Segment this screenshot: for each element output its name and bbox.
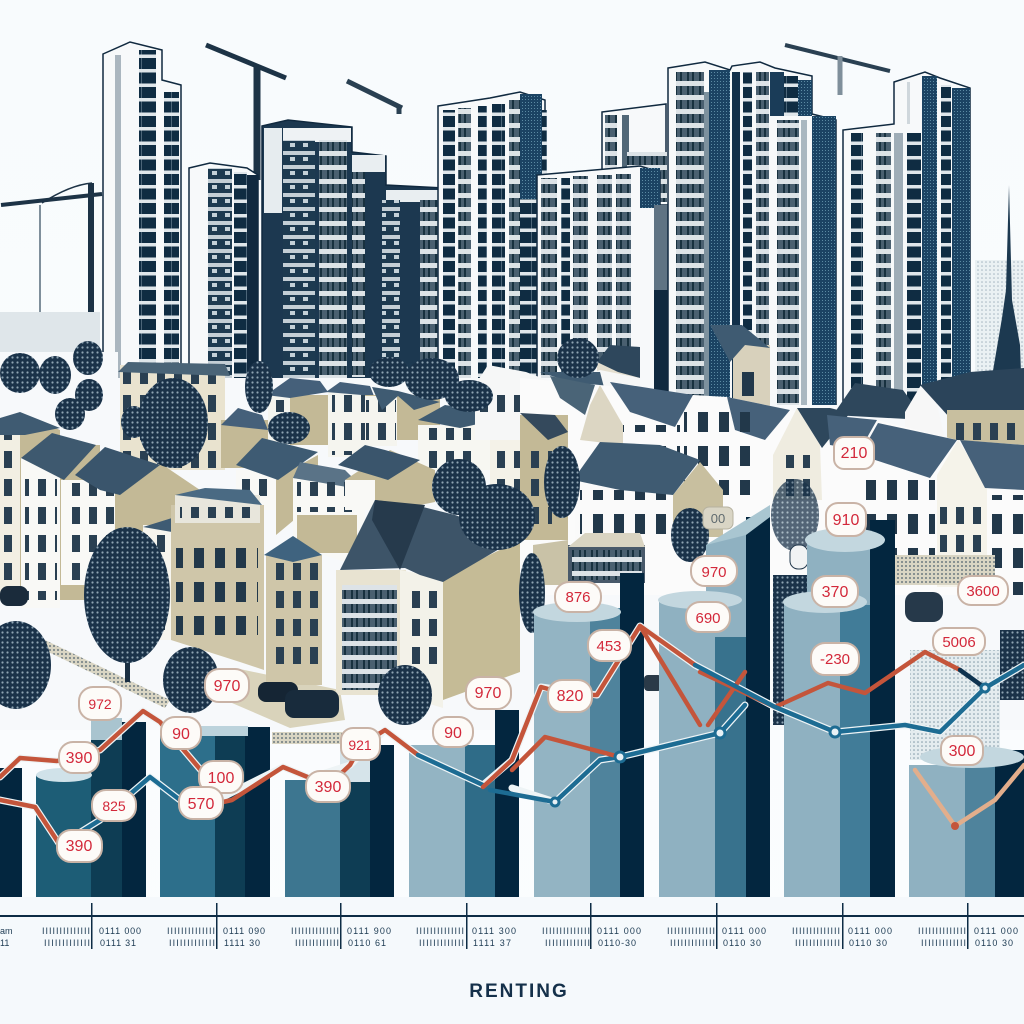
axis labels: 0111 000	[597, 926, 641, 936]
gravel strips	[40, 640, 342, 744]
callout: 825	[102, 798, 126, 814]
tower 7	[843, 72, 970, 410]
red spike	[640, 626, 960, 725]
callout	[811, 643, 859, 675]
callout	[548, 680, 592, 712]
tower 6	[668, 62, 836, 420]
axis labels: 0111 000	[99, 926, 141, 936]
callout	[92, 790, 136, 821]
tower 4	[438, 92, 547, 380]
back block behind tower 5	[602, 104, 667, 202]
gabled corner house	[336, 500, 520, 708]
tower 5	[537, 166, 668, 405]
callout: 876	[565, 589, 591, 606]
tree	[445, 380, 493, 412]
skyline of apartment towers	[0, 42, 1024, 420]
bar 7	[783, 520, 895, 897]
axis labels: 11	[0, 938, 9, 948]
axis labels: 0110 61	[348, 938, 386, 948]
callout: 970	[475, 685, 501, 702]
crane right	[785, 45, 890, 95]
right front house	[520, 413, 723, 585]
parked cars	[0, 545, 943, 718]
callout	[306, 771, 350, 802]
axis labels: IIIIIIIIIIIII	[670, 938, 715, 948]
tower 2	[189, 163, 258, 385]
axis labels: 0110 30	[723, 938, 761, 948]
shrub panel	[1000, 630, 1024, 700]
callout	[161, 717, 201, 749]
neighbourhood ground	[0, 352, 1024, 730]
bar 5	[533, 573, 644, 897]
house centre	[293, 462, 365, 562]
callout	[686, 602, 730, 632]
tree	[557, 338, 599, 378]
callout: 210	[841, 445, 867, 462]
axis labels: IIIIIIIIIIIIII	[792, 926, 840, 936]
house	[365, 387, 440, 446]
tower 1	[103, 42, 181, 380]
tree	[268, 412, 310, 444]
tree	[0, 621, 51, 709]
church spire	[988, 185, 1022, 400]
callout	[199, 761, 243, 793]
tree	[0, 353, 40, 393]
tan tower wing	[264, 536, 322, 685]
house centre left	[236, 438, 318, 535]
axis labels: IIIIIIIIIIIII	[545, 938, 590, 948]
red line lower left	[0, 800, 60, 845]
axis labels: 0110 30	[849, 938, 887, 948]
conservatory	[568, 533, 645, 583]
bar 6	[658, 505, 770, 897]
blue rise left	[60, 777, 180, 845]
tree	[55, 398, 85, 430]
axis labels: 0111 000	[722, 926, 766, 936]
callout: 5006	[942, 634, 976, 651]
callout: 970	[701, 564, 727, 581]
callout: 972	[88, 696, 112, 712]
distant fence	[0, 312, 100, 362]
bar chart	[0, 505, 1024, 897]
house	[118, 362, 230, 470]
tree	[405, 358, 459, 400]
bar 0	[0, 768, 22, 897]
callout	[703, 507, 733, 529]
axis labels: IIIIIIIIIIIIII	[42, 926, 90, 936]
tree	[73, 341, 103, 375]
tan ground	[533, 540, 568, 585]
tree	[75, 379, 103, 411]
tree	[771, 479, 819, 551]
house with broad side	[61, 447, 200, 585]
tree	[369, 357, 409, 387]
axis labels: IIIIIIIIIIIIII	[918, 926, 966, 936]
axis labels: IIIIIIIIIIIII	[44, 938, 90, 948]
roof row	[475, 365, 640, 440]
house front beige	[21, 433, 100, 608]
tree	[459, 484, 535, 550]
callout	[341, 728, 380, 760]
value callouts	[57, 437, 1008, 862]
axis labels: IIIIIIIIIIIII	[921, 938, 966, 948]
axis labels: IIIIIIIIIIIIII	[667, 926, 715, 936]
tan courtyard	[225, 668, 345, 728]
house	[266, 378, 328, 445]
house	[418, 405, 496, 470]
dotted panel behind last bar	[910, 650, 1000, 760]
callout	[826, 503, 866, 536]
callout	[79, 687, 121, 720]
time axis	[0, 903, 1024, 949]
callout	[588, 630, 631, 661]
white halos	[0, 626, 1024, 845]
tree	[138, 378, 208, 468]
callout: 300	[949, 743, 975, 760]
back row of houses left	[118, 362, 568, 518]
callout: 690	[695, 610, 721, 627]
hedge	[773, 575, 809, 725]
left houses row	[0, 412, 520, 708]
axis labels: 0111 900	[347, 926, 391, 936]
callout: 100	[208, 770, 234, 787]
callout	[834, 437, 874, 469]
callout	[179, 787, 223, 819]
tree	[121, 406, 147, 438]
red lower arc	[512, 737, 620, 770]
callout	[933, 628, 985, 655]
callout: 90	[172, 726, 190, 743]
axis labels: IIIIIIIIIIIIII	[167, 926, 215, 936]
footer background	[0, 897, 1024, 1024]
axis labels: IIIIIIIIIIIIII	[291, 926, 339, 936]
axis labels: 0111 090	[223, 926, 265, 936]
callout	[57, 830, 102, 862]
red line middle	[180, 730, 418, 806]
tree group	[0, 338, 1024, 725]
callout	[958, 576, 1008, 605]
crane small	[347, 81, 402, 114]
callout: 370	[822, 584, 848, 601]
axis labels: 1111 30	[224, 938, 260, 948]
callout	[555, 582, 601, 612]
data points	[551, 684, 989, 806]
terrace	[520, 376, 1024, 595]
blue right	[695, 665, 1024, 732]
callout	[812, 576, 858, 607]
axis labels: 0110-30	[598, 938, 636, 948]
blue dip centre	[418, 705, 745, 802]
large tan house	[171, 488, 264, 670]
bar 3	[285, 745, 394, 897]
tree with trunk	[84, 527, 170, 682]
house with dormers	[338, 445, 435, 510]
callout	[941, 736, 983, 765]
tree	[378, 665, 432, 725]
axis labels	[0, 926, 1018, 948]
callout: 570	[188, 796, 214, 813]
axis labels: IIIIIIIIIIIII	[295, 938, 339, 948]
crane centre	[206, 45, 286, 180]
tree	[163, 647, 219, 713]
tree	[544, 446, 580, 518]
crane left	[1, 183, 102, 340]
axis labels: 0110 30	[975, 938, 1013, 948]
callout: 390	[66, 750, 92, 767]
tree	[519, 553, 545, 633]
tree	[432, 459, 486, 515]
axis labels: 0111 31	[100, 938, 136, 948]
callout	[59, 742, 99, 773]
hedge right	[895, 555, 995, 585]
axis labels: IIIIIIIIIIIII	[795, 938, 840, 948]
house	[326, 382, 374, 457]
house far left	[0, 412, 60, 592]
axis labels: IIIIIIIIIIIIII	[542, 926, 590, 936]
peach line	[915, 765, 1024, 826]
callout: 390	[315, 779, 341, 796]
tree	[39, 356, 71, 394]
callout: 921	[348, 737, 372, 753]
callout	[205, 669, 249, 702]
terrace back right	[833, 368, 1024, 445]
callout: 3600	[966, 583, 1000, 600]
title: RENTING	[469, 981, 569, 1002]
tower 3	[262, 120, 443, 380]
axis labels: 0111 000	[974, 926, 1018, 936]
red line upper left	[0, 711, 205, 777]
callout: -230	[820, 651, 850, 668]
callout: 820	[557, 688, 583, 705]
house	[597, 345, 640, 384]
tree	[245, 361, 273, 413]
axis labels: IIIIIIIIIIIII	[419, 938, 464, 948]
house	[490, 412, 568, 518]
axis labels: IIIIIIIIIIIIII	[416, 926, 464, 936]
callout	[691, 556, 737, 586]
bar 4	[409, 710, 519, 897]
house lower left wing	[143, 518, 173, 640]
axis labels: 1111 37	[473, 938, 511, 948]
bar 1	[36, 718, 146, 897]
axis labels: 0111 300	[472, 926, 516, 936]
axis labels: am	[0, 926, 13, 936]
axis labels: IIIIIIIIIIIII	[169, 938, 215, 948]
callout: 390	[66, 838, 92, 855]
callout: 910	[833, 512, 859, 529]
church haze	[975, 260, 1024, 400]
callout	[466, 677, 511, 709]
line series	[0, 626, 1024, 845]
axis labels: 0111 000	[848, 926, 892, 936]
bar 8	[909, 746, 1024, 897]
bar 2	[160, 726, 270, 897]
callout: 453	[596, 638, 622, 655]
callout: 970	[214, 678, 240, 695]
house: tall gable	[710, 325, 770, 415]
tree	[671, 508, 709, 562]
callout: 00	[711, 511, 725, 526]
back row of houses right	[475, 325, 1024, 595]
red rise centre	[483, 626, 695, 787]
house	[221, 408, 268, 468]
callout: 90	[444, 725, 462, 742]
callout	[433, 717, 473, 747]
